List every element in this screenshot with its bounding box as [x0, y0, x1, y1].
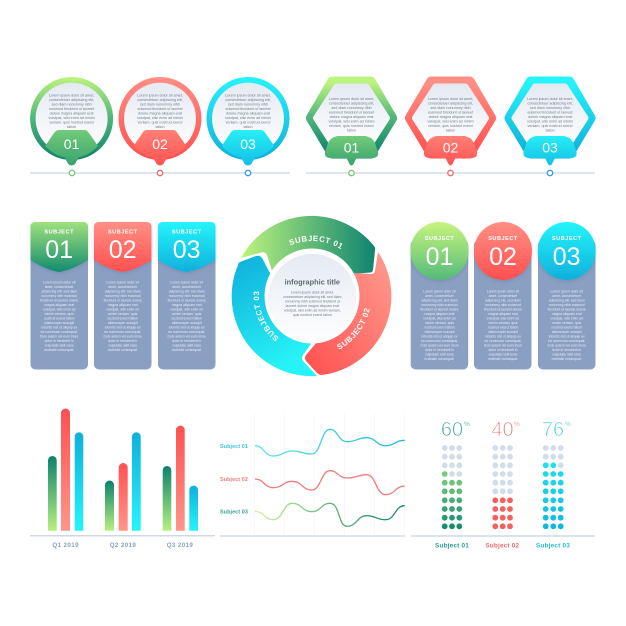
card 03: nostrud exerci tation	[171, 317, 202, 321]
card 01: vulputate velit esse	[425, 353, 454, 357]
card 01: Lorem ipsum dolor sit	[43, 281, 75, 285]
center circle: nonummy nibh euismod tincidunt ut	[285, 299, 340, 303]
card 02: molestie consequat.	[488, 357, 518, 361]
dots: subject 01 60%	[435, 419, 470, 550]
center circle	[264, 248, 360, 344]
circle callout 03: volutpat, wisi enim ad minim	[225, 116, 271, 120]
hexagon callout 03: sed diam nonummy nibh	[530, 106, 570, 110]
card 02: nostrud exerci tation	[488, 326, 518, 330]
hexagon callout 02: tation	[446, 128, 455, 132]
line chart: Subject 03	[220, 510, 248, 516]
circle callout 02	[118, 77, 202, 176]
card 01: ea commodo consequat.	[41, 330, 78, 334]
card 02: dolor in hendrerit in	[108, 339, 137, 343]
card 03: volutpat, wisi enim ad	[550, 317, 583, 321]
card 03: adipiscing elit, sed diam	[549, 299, 585, 303]
card 02: minim veniam, quis	[108, 312, 138, 316]
card 02: Lorem ipsum dolor sit	[487, 290, 519, 294]
hexagon callout 01: tation	[347, 128, 356, 132]
hexagon callout 02: veniam, quis nostrud exerci	[428, 124, 473, 128]
card 01	[410, 222, 468, 370]
card 03: tincidunt ut laoreet dolore	[548, 308, 586, 312]
card 01: volutpat, wisi enim ad	[43, 308, 76, 312]
circle callout 02: 02	[152, 136, 168, 152]
card 03: magna aliquam erat	[172, 303, 202, 307]
dot chart	[411, 419, 595, 550]
center circle: laoreet dolore magna aliquam erat	[286, 304, 339, 308]
card 02: volutpat, wisi enim ad	[106, 308, 139, 312]
card 01: SUBJECT	[44, 230, 74, 236]
card 01: ea commodo consequat.	[421, 339, 458, 343]
dots: subject 03 76%	[536, 419, 571, 550]
dots: subject 01 60%: %	[464, 421, 470, 428]
card 01: tincidunt ut laoreet dolore	[40, 299, 78, 303]
circle callout 03	[206, 77, 290, 176]
segment: subject 02	[305, 252, 392, 375]
circle callout 03: veniam, quis nostrud exerci	[226, 120, 271, 124]
card 01: lobortis nisl ut aliquip ex	[41, 326, 78, 330]
circle callout 01: dolore magna aliquam erat	[50, 111, 94, 115]
center circle: volutpat, wisi enim ad minim veniam,	[284, 308, 341, 312]
card 03: tincidunt ut laoreet dolore	[168, 299, 206, 303]
card 02: tincidunt ut laoreet dolore	[484, 308, 522, 312]
hexagon callout 01: euismod tincidunt ut laoreet	[329, 110, 374, 114]
card 01: 01	[426, 243, 453, 271]
card 02: adipiscing elit, sed diam	[485, 299, 521, 303]
card 03: Duis autem vel eum iriure	[167, 335, 206, 339]
card 03: vulputate velit esse	[552, 353, 581, 357]
circle callout 03: Lorem ipsum dolor sit amet,	[225, 93, 271, 97]
card 02: tincidunt ut laoreet dolore	[104, 299, 142, 303]
card 02: SUBJECT	[488, 236, 518, 242]
circle callout 03: sed diam nonummy nibh	[228, 102, 268, 106]
circle callout 01	[30, 77, 113, 176]
card 02	[94, 222, 152, 370]
hexagon callout 01: volutpat, wisi enim ad minim	[328, 120, 375, 124]
circle callout 01: tation	[67, 125, 76, 129]
card 03: volutpat, wisi enim ad	[170, 308, 203, 312]
bar chart: Q3 2019	[167, 542, 193, 549]
hexagon callout 03: Lorem ipsum dolor sit amet,	[527, 97, 573, 101]
segment: subject 03	[232, 256, 317, 376]
hexagon callout 02: euismod tincidunt ut laoreet	[428, 110, 473, 114]
hexagon callout 02: consectetuer adipiscing elit,	[428, 102, 473, 106]
circle callout 01: 01	[64, 136, 80, 152]
card 02: amet, consectetuer	[489, 294, 518, 298]
card 01: Lorem ipsum dolor sit	[423, 290, 456, 294]
hexagon callout 01	[312, 82, 392, 176]
card 02: minim veniam, quis	[488, 321, 518, 325]
panel: hexagon callouts	[306, 82, 595, 176]
hexagon callout 01: Lorem ipsum dolor sit amet,	[329, 97, 374, 101]
circle callout 03: 03	[240, 136, 256, 152]
card 01: minim veniam, quis	[45, 312, 74, 316]
card 03: ullamcorper suscipit	[172, 321, 202, 325]
card 01: nonummy nibh euismod	[422, 303, 458, 307]
hexagon callout 03: euismod tincidunt ut laoreet	[527, 110, 573, 114]
hexagon callout 01: sed diam nonummy nibh	[331, 106, 372, 110]
card 02: adipiscing elit, sed diam	[105, 290, 141, 294]
card 03: 03	[173, 236, 201, 264]
card 01: nostrud exerci tation	[44, 317, 75, 321]
circle callout 02: sed diam nonummy nibh	[140, 102, 180, 106]
hexagon callout 02: Lorem ipsum dolor sit amet,	[428, 97, 473, 101]
card 03: Lorem ipsum dolor sit	[550, 290, 583, 294]
bar chart	[30, 408, 215, 549]
panel: chevron subject cards	[30, 222, 216, 370]
hexagon callout 01: dolore magna aliquam erat	[330, 115, 373, 119]
card 01	[30, 222, 88, 370]
circle callout 01: volutpat, wisi enim ad minim	[49, 116, 95, 120]
card 01: dolor in hendrerit in	[425, 348, 454, 352]
dots: subject 02 40%	[485, 419, 520, 550]
card 01: Duis autem vel eum iriure	[420, 344, 459, 348]
line chart	[220, 413, 405, 536]
card 03	[158, 222, 216, 370]
card 03	[538, 222, 596, 370]
hexagon callout 01: 01	[344, 140, 359, 156]
card 01: ullamcorper suscipit	[425, 330, 455, 334]
card 02: Duis autem vel eum iriure	[484, 344, 522, 348]
card 03: minim veniam, quis	[172, 312, 202, 316]
hexagon callout 02: volutpat, wisi enim ad minim	[427, 120, 474, 124]
circle callout 02: euismod tincidunt ut laoreet	[137, 107, 183, 111]
center circle: Lorem ipsum dolor sit amet,	[291, 290, 334, 294]
card 03: adipiscing elit, sed diam	[169, 290, 205, 294]
dots: subject 03 76%: Subject 03	[536, 542, 570, 550]
circle callout 01: veniam, quis nostrud exerci	[49, 120, 94, 124]
bar chart: Q1 2019	[52, 542, 79, 549]
card 03: lobortis nisl ut aliquip ex	[549, 335, 585, 339]
hexagon callout 03: consectetuer adipiscing elit,	[527, 102, 573, 106]
card 01: amet, consectetuer	[425, 294, 455, 298]
panel: circle callouts	[30, 77, 290, 176]
card 01: volutpat, wisi enim ad	[423, 317, 456, 321]
hexagon callout 03: dolore magna aliquam erat	[528, 115, 572, 119]
card 02: magna aliquam erat	[108, 303, 138, 307]
card 02: SUBJECT	[108, 230, 138, 236]
circle callout 02: tation	[155, 125, 165, 129]
hexagon callout 02: dolore magna aliquam erat	[429, 115, 472, 119]
card 01: SUBJECT	[425, 236, 454, 242]
circle callout 03: consectetuer adipiscing elit,	[225, 98, 271, 102]
card 03: lobortis nisl ut aliquip ex	[169, 326, 205, 330]
card 03: vulputate velit esse	[172, 344, 201, 348]
center circle: infographic title	[285, 278, 340, 286]
card 02: ea commodo consequat.	[104, 330, 141, 334]
hexagon callout 02	[410, 82, 490, 176]
card 03: molestie consequat.	[172, 348, 202, 352]
card 03: amet, consectetuer	[552, 294, 582, 298]
card 01: minim veniam, quis	[425, 321, 454, 325]
card 02: vulputate velit esse	[108, 344, 137, 348]
circle callout 03: euismod tincidunt ut laoreet	[225, 107, 271, 111]
circle callout 02: consectetuer adipiscing elit,	[137, 98, 183, 102]
card 03: amet, consectetuer	[172, 285, 202, 289]
card 02: dolor in hendrerit in	[488, 348, 518, 352]
hexagon callout 02: 02	[443, 140, 458, 156]
bar chart: Q2 2019	[110, 542, 136, 549]
card 02: ullamcorper suscipit	[488, 330, 518, 334]
card 02: 02	[109, 236, 137, 264]
card 03: dolor in hendrerit in	[552, 348, 581, 352]
card 02: amet, consectetuer	[108, 285, 138, 289]
card 03: molestie consequat.	[552, 357, 582, 361]
card 02: Lorem ipsum dolor sit	[106, 281, 139, 285]
segment: subject 01: SUBJECT 01	[289, 236, 342, 249]
card 01: ullamcorper suscipit	[44, 321, 74, 325]
card 01: molestie consequat.	[424, 357, 455, 361]
dots: subject 02 40%: %	[514, 421, 520, 428]
card 02: ea commodo consequat.	[484, 339, 522, 343]
card 02: vulputate velit esse	[489, 353, 518, 357]
card 03: nonummy nibh euismod	[549, 303, 585, 307]
card 03: ea commodo consequat.	[548, 339, 585, 343]
card 03: nonummy nibh euismod	[169, 294, 205, 298]
card 01: vulputate velit esse	[45, 344, 74, 348]
card 03: nostrud exerci tation	[551, 326, 582, 330]
card 01: adipiscing elit, sed diam	[422, 299, 458, 303]
card 01: lobortis nisl ut aliquip ex	[422, 335, 458, 339]
card 02: nostrud exerci tation	[107, 317, 138, 321]
hexagon callout 03: tation	[545, 128, 555, 132]
card 02: volutpat, wisi enim ad	[487, 317, 519, 321]
card 02: magna aliquam erat	[488, 312, 518, 316]
circle callout 01: sed diam nonummy nibh	[52, 102, 92, 106]
circle callout 03: dolore magna aliquam erat	[226, 111, 270, 115]
card 03: Lorem ipsum dolor sit	[170, 281, 203, 285]
card 03: Duis autem vel eum iriure	[547, 344, 586, 348]
center circle: consectetuer adipiscing elit, sed diam	[283, 295, 341, 299]
segment: subject 01	[241, 216, 376, 274]
circle callout 01: consectetuer adipiscing elit,	[49, 98, 94, 102]
segment: subject 03: SUBJECT 03	[254, 292, 278, 341]
dots: subject 02 40%: Subject 02	[485, 542, 520, 550]
card 01: magna aliquam erat	[44, 303, 74, 307]
dots: subject 03 76%: %	[565, 421, 571, 428]
card 01: 01	[45, 236, 73, 264]
circle callout 01: Lorem ipsum dolor sit amet,	[49, 93, 94, 97]
line chart: Subject 01	[220, 444, 248, 450]
card 01: tincidunt ut laoreet dolore	[420, 308, 459, 312]
card 02: Duis autem vel eum iriure	[103, 335, 142, 339]
hexagon callout 03	[510, 82, 590, 176]
card 01: molestie consequat.	[44, 348, 74, 352]
card 01: adipiscing elit, sed diam	[41, 290, 77, 294]
circle callout 02: dolore magna aliquam erat	[138, 111, 182, 115]
panel: circle subject cards	[410, 222, 596, 370]
dots: subject 01 60%: Subject 01	[435, 542, 469, 550]
dots: subject 03 76%: 76	[542, 419, 564, 441]
card 03: SUBJECT	[172, 230, 202, 236]
timeline: circles	[30, 172, 290, 174]
card 02: lobortis nisl ut aliquip ex	[105, 326, 141, 330]
dots: subject 02 40%: 40	[491, 419, 514, 441]
card 03: minim veniam, quis	[552, 321, 582, 325]
card 03: ea commodo consequat.	[168, 330, 205, 334]
circle callout 02: Lorem ipsum dolor sit amet,	[137, 93, 183, 97]
circle callout 02: volutpat, wisi enim ad minim	[137, 116, 183, 120]
card 02: nonummy nibh euismod	[485, 303, 521, 307]
circle callout 03: tation	[243, 125, 253, 129]
line chart: Subject 02	[220, 477, 248, 483]
card 01: magna aliquam erat	[425, 312, 455, 316]
card 01: amet, consectetuer	[45, 285, 74, 289]
hexagon callout 03: volutpat, wisi enim ad minim	[527, 120, 573, 124]
hexagon callout 02: sed diam nonummy nibh	[430, 106, 471, 110]
card 02	[474, 222, 532, 370]
dots: subject 01 60%: 60	[441, 419, 463, 441]
card 03: magna aliquam erat	[552, 312, 582, 316]
chart: cycle donut	[232, 216, 392, 376]
card 03: dolor in hendrerit in	[172, 339, 201, 343]
card 03: 03	[553, 243, 581, 271]
circle callout 02: veniam, quis nostrud exerci	[138, 120, 183, 124]
hexagon callout 01: veniam, quis nostrud exerci	[329, 124, 374, 128]
timeline: hexagons	[306, 172, 595, 174]
card 01: Duis autem vel eum iriure	[40, 335, 79, 339]
card 03: ullamcorper suscipit	[552, 330, 582, 334]
center circle: quis nostrud exerci tation	[293, 313, 332, 317]
card 01: nonummy nibh euismod	[41, 294, 77, 298]
card 03: SUBJECT	[552, 236, 582, 242]
card 02: molestie consequat.	[108, 348, 138, 352]
segment: subject 02: SUBJECT 02	[337, 308, 370, 350]
card 02: lobortis nisl ut aliquip ex	[485, 335, 521, 339]
hexagon callout 03: veniam, quis nostrud exerci	[528, 124, 573, 128]
card 02: ullamcorper suscipit	[108, 321, 138, 325]
circle callout 01: euismod tincidunt ut laoreet	[49, 107, 94, 111]
card 01: dolor in hendrerit in	[45, 339, 74, 343]
card 02: nonummy nibh euismod	[105, 294, 141, 298]
card 02: 02	[489, 243, 517, 271]
hexagon callout 03: 03	[542, 140, 558, 156]
hexagon callout 01: consectetuer adipiscing elit,	[329, 102, 374, 106]
card 01: nostrud exerci tation	[424, 326, 455, 330]
